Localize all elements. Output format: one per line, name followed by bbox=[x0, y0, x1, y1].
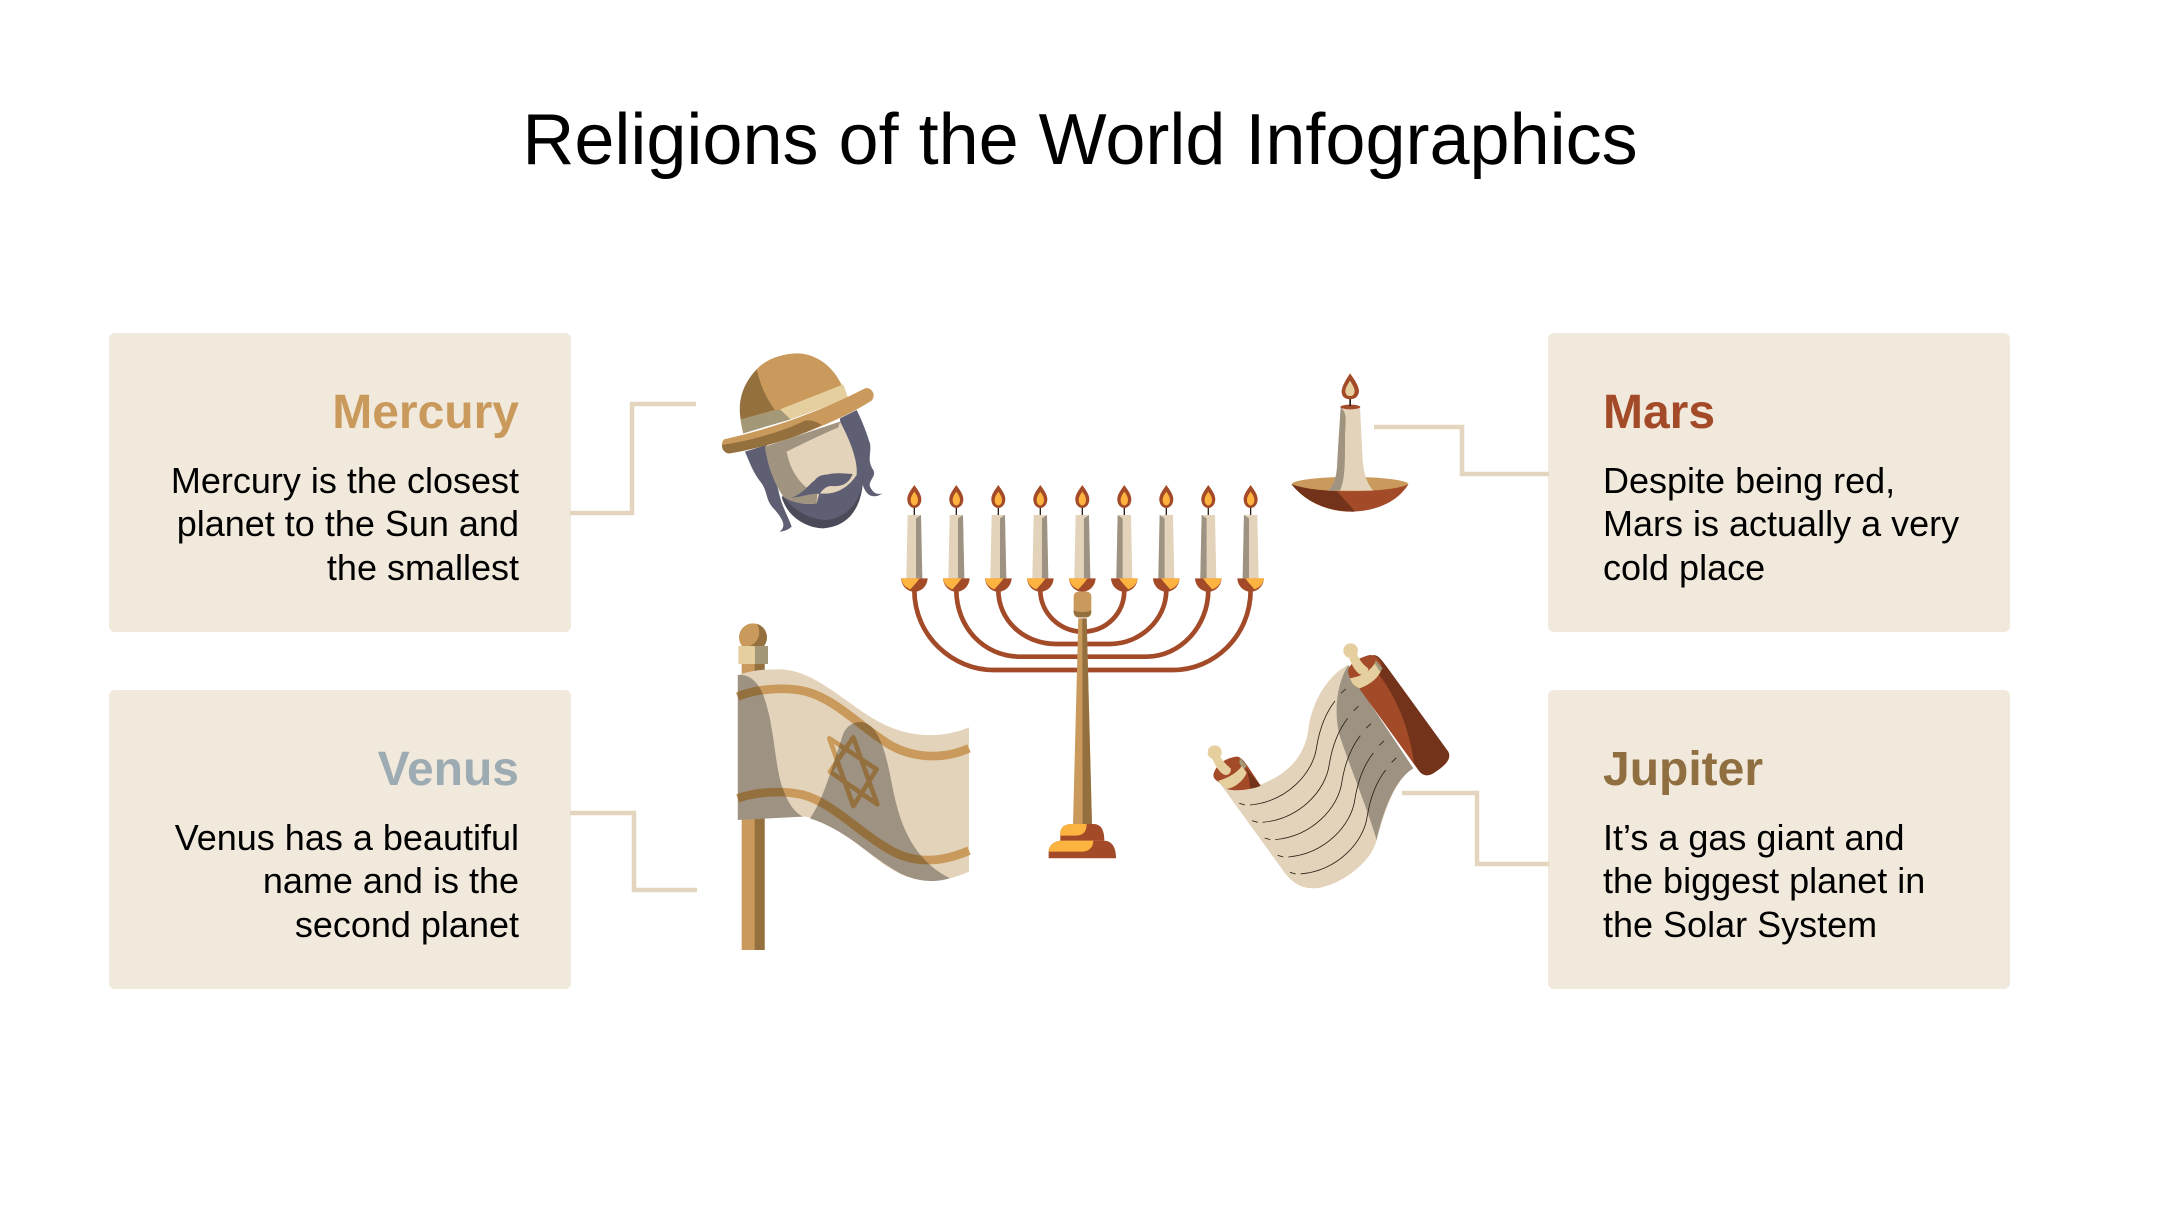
text: Jupiter description: the biggest planet in bbox=[1603, 860, 1925, 901]
panel: Mercury bbox=[109, 333, 571, 632]
scroll text lines bbox=[1239, 689, 1396, 874]
panel: Jupiter bbox=[1548, 690, 2010, 989]
connector: Jupiter bbox=[1402, 793, 1549, 864]
text: Venus description: name and is the bbox=[263, 860, 519, 901]
heading: Jupiter: Jupiter bbox=[1603, 742, 1763, 796]
flag pole bbox=[738, 623, 768, 950]
menorah arms bbox=[914, 590, 1251, 670]
text: Mars description bbox=[1603, 460, 1959, 588]
text: Mercury description bbox=[171, 460, 519, 588]
text: Venus description: Venus has a beautiful bbox=[175, 817, 519, 858]
text: Mercury description: planet to the Sun and bbox=[177, 503, 519, 544]
text: Venus description bbox=[174, 817, 519, 945]
icon: torah scroll bbox=[1208, 643, 1449, 888]
panel: Mars bbox=[1548, 333, 2010, 632]
heading: Mercury: Mercury bbox=[332, 386, 519, 438]
flag shading bbox=[738, 674, 950, 882]
connector: Mercury bbox=[570, 404, 696, 513]
connector: Mars bbox=[1374, 427, 1549, 474]
text: Mercury description: the smallest bbox=[327, 547, 519, 588]
text: Mars description: Mars is actually a very bbox=[1603, 503, 1959, 544]
flag cloth bbox=[738, 669, 969, 881]
heading: Mars: Mars bbox=[1603, 386, 1715, 438]
icon: man with hat bbox=[722, 353, 883, 532]
connector: Venus bbox=[570, 813, 697, 890]
menorah candles and flames bbox=[901, 485, 1264, 592]
heading: Venus: Venus bbox=[378, 742, 519, 796]
title: Religions of the World Infographics bbox=[522, 100, 1638, 180]
text: Mars description: Despite being red, bbox=[1603, 460, 1895, 501]
scroll shading bbox=[1337, 665, 1413, 840]
left roller bbox=[1208, 745, 1261, 790]
icon: candle lamp bbox=[1292, 373, 1408, 512]
star of David bbox=[829, 737, 877, 806]
text: Mars description: cold place bbox=[1603, 547, 1765, 588]
text: Jupiter description: the Solar System bbox=[1603, 904, 1877, 945]
text: Jupiter description: It’s a gas giant and bbox=[1603, 817, 1905, 858]
text: Mercury description: Mercury is the closest bbox=[171, 460, 519, 501]
menorah base bbox=[1049, 824, 1116, 858]
scroll parchment bbox=[1220, 665, 1413, 888]
text: Jupiter description bbox=[1603, 817, 1925, 945]
icon: menorah bbox=[901, 485, 1264, 858]
icon: flag with star bbox=[738, 623, 969, 950]
text: Venus description: second planet bbox=[295, 904, 519, 945]
menorah stem bbox=[1073, 592, 1092, 825]
panel: Venus bbox=[109, 690, 571, 989]
right roller bbox=[1343, 643, 1449, 775]
flag stripes bbox=[738, 689, 969, 860]
